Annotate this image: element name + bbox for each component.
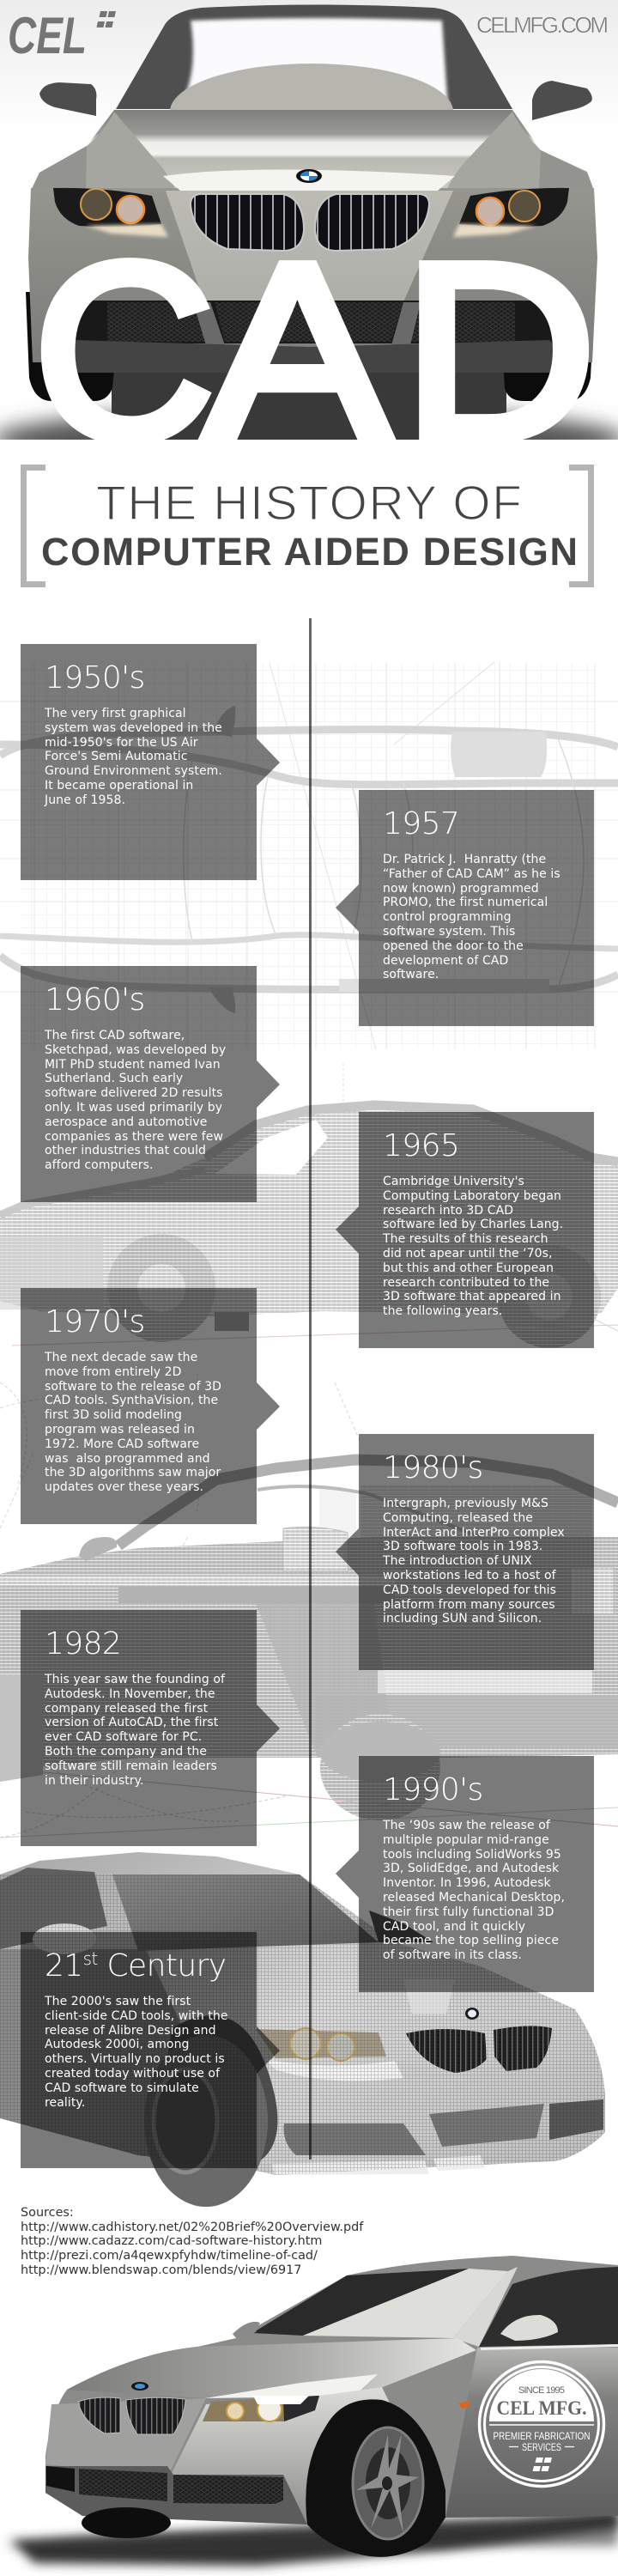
panel: 1965: but this and other European — [383, 1261, 554, 1275]
panel: 1960's: only. It was used primarily by — [45, 1101, 222, 1115]
panel: 1957: control programming — [383, 910, 512, 924]
panel: 1990's: their first fully functional 3D — [383, 1905, 554, 1919]
panel: 1957: software. — [383, 968, 439, 981]
sources: http://www.cadhistory.net/02%20Brief%20Overview.pdf — [21, 2221, 363, 2234]
title with brackets — [24, 467, 591, 584]
panel: 21st Century — [21, 1932, 280, 2168]
panel: 1980's: CAD tools developed for this — [383, 1583, 556, 1597]
panel: 1965: 3D software that appeared in — [383, 1290, 561, 1303]
panel: 1960's — [21, 966, 280, 1202]
panel: 1990's: 3D, SolidEdge, and Autodesk — [383, 1862, 559, 1875]
panel: 1957: opened the door to the — [383, 939, 524, 953]
panel: 21st Century: client-side CAD tools, with the — [45, 2009, 228, 2023]
hero: front view of car — [0, 0, 618, 471]
panel: 1980's: Computing, released the — [383, 1511, 533, 1525]
panel: 1957: development of CAD — [383, 954, 508, 968]
panel: 1960's: other industries that could — [45, 1144, 206, 1157]
panel: 1990's: tools including SolidWorks 95 — [383, 1848, 561, 1862]
panel: 1982: software still remain leaders — [45, 1759, 217, 1773]
panel: 1980's: The introduction of UNIX — [383, 1554, 532, 1568]
panel: 1970's: 1972. More CAD software — [45, 1437, 199, 1451]
panel: 1970's — [21, 1288, 280, 1524]
panel: 21st Century: 21st Century — [45, 1948, 226, 1984]
panel: 21st Century: created today without use of — [45, 2067, 220, 2081]
website label: CELMFG.COM — [476, 12, 609, 38]
panel: 21st Century: others. Virtually no product is — [45, 2052, 225, 2066]
panel: 1950's — [21, 644, 280, 880]
panel: 1950's: Ground Environment system. — [45, 764, 222, 778]
panel: 1970's: the 3D algorithms saw major — [45, 1466, 221, 1479]
panel: 1960's: software delivered 2D results — [45, 1086, 223, 1100]
panel: 1970's: move from entirely 2D — [45, 1365, 182, 1379]
panel: 1980's: 3D software tools in 1983. — [383, 1540, 542, 1553]
panel: 1957: PROMO, the first numerical — [383, 896, 548, 909]
panel: 1957: now known) programmed — [383, 882, 539, 896]
panel: 1950's: mid-1950's for the US Air — [45, 736, 198, 750]
panel: 1965: The results of this research — [383, 1232, 548, 1246]
panel: 21st Century: The 2000's saw the first — [45, 1995, 191, 2008]
panel: 1980's — [336, 1434, 594, 1670]
panel: 1990's: CAD tool, and it quickly — [383, 1920, 525, 1934]
panel: 1970's: The next decade saw the — [45, 1351, 197, 1364]
panel: 1980's: 1980's — [383, 1450, 483, 1485]
panel: 1950's: system was developed in the — [45, 721, 222, 735]
panel: 1965: Cambridge University's — [383, 1175, 524, 1188]
panel: 1957 — [336, 790, 594, 1026]
panel: 1965: software led by Charles Lang. — [383, 1218, 563, 1231]
sources: Sources: — [21, 2206, 74, 2220]
panel: 1965: did not apear until the ‘70s, — [383, 1247, 553, 1261]
panel: 1982: 1982 — [45, 1626, 121, 1662]
panel: 1980's: InterAct and InterPro complex — [383, 1526, 565, 1540]
panel: 1982: version of AutoCAD, the first — [45, 1716, 218, 1729]
panel: 1980's: platform from many sources — [383, 1598, 555, 1612]
mesh car — [0, 1852, 618, 2207]
panel: 1990's: The ‘90s saw the release of — [383, 1819, 550, 1832]
wireframe: side view car — [0, 1063, 618, 1382]
wireframe: top view car — [0, 662, 618, 1049]
panel: 1957: “Father of CAD CAM” as he is — [383, 867, 560, 881]
bottom car — [0, 2256, 618, 2566]
panel: 1960's: aerospace and automotive — [45, 1115, 207, 1129]
panel: 1950's: It became operational in — [45, 779, 193, 793]
sources: http://prezi.com/a4qewxpfyhdw/timeline-of-cad/ — [21, 2249, 318, 2263]
panel: 1960's: 1960's — [45, 982, 145, 1018]
badge: CEL MFG: PREMIER FABRICATION — [493, 2430, 591, 2442]
panel: 1970's: program was released in — [45, 1423, 195, 1437]
panel: 1950's: The very first graphical — [45, 707, 186, 720]
sources — [21, 2206, 364, 2277]
sources: http://www.blendswap.com/blends/view/6917 — [21, 2263, 301, 2277]
panel: 1990's — [336, 1756, 594, 1992]
panel: 1990's: of software in its class. — [383, 1948, 522, 1962]
panel: 1960's: Sketchpad, was developed by — [45, 1043, 226, 1057]
panel: 1982: Autodesk. In November, the — [45, 1687, 215, 1701]
panel: 1970's: CAD tools. SynthaVision, the — [45, 1394, 218, 1407]
panel: 1970's: first 3D solid modeling — [45, 1408, 182, 1422]
panel: 1980's: Intergraph, previously M&S — [383, 1497, 548, 1510]
panel: 1982 — [21, 1610, 280, 1846]
panel: 1970's: updates over these years. — [45, 1480, 203, 1494]
panel: 1965: research contributed to the — [383, 1276, 549, 1290]
panel: 1965: research into 3D CAD — [383, 1204, 513, 1218]
panel: 1982: company released the first — [45, 1702, 208, 1716]
panel: 1960's: afford computers. — [45, 1158, 153, 1172]
panel: 1982: Both the company and the — [45, 1745, 207, 1759]
panel: 1965: Computing Laboratory began — [383, 1189, 561, 1203]
panel: 1965: 1965 — [383, 1128, 459, 1163]
panel: 1950's: Force's Semi Automatic — [45, 750, 188, 763]
heading: CAD: A — [204, 212, 391, 491]
panel: 1960's: Sutherland. Such early — [45, 1072, 183, 1085]
panel: 1990's: 1990's — [383, 1772, 483, 1807]
icon: BMW badge — [296, 169, 322, 183]
panel: 1965: the following years. — [383, 1304, 502, 1318]
panel: 1957: Dr. Patrick J. Hanratty (the — [383, 853, 546, 866]
panel: 1960's: MIT PhD student named Ivan — [45, 1058, 221, 1072]
panel: 1970's: 1970's — [45, 1304, 145, 1340]
panel: 1960's: companies as there were few — [45, 1130, 223, 1144]
heading: CAD — [33, 211, 597, 492]
heading: CAD: D — [403, 211, 597, 492]
heading: CAD: C — [33, 211, 215, 491]
title with brackets: THE HISTORY OF — [96, 476, 522, 531]
panel: 1982: in their industry. — [45, 1774, 144, 1788]
panel: 1957: 1957 — [383, 806, 459, 841]
wireframe: three-quarter view car — [0, 1382, 618, 1838]
panel: 1990's: multiple popular mid-range — [383, 1833, 549, 1847]
panel: 1950's: 1950's — [45, 660, 145, 696]
panel: 1970's: software to the release of 3D — [45, 1380, 221, 1394]
timeline axis — [309, 618, 311, 2160]
badge: CEL MFG: SERVICES — [522, 2443, 561, 2453]
logo: CEL: CEL — [8, 7, 87, 64]
panel: 21st Century: CAD software to simulate — [45, 2081, 199, 2095]
panel: 1950's: June of 1958. — [45, 793, 125, 807]
panel: 1970's: was also programmed and — [45, 1452, 210, 1466]
title with brackets: COMPUTER AIDED DESIGN — [41, 530, 578, 574]
sources: http://www.cadazz.com/cad-software-history.htm — [21, 2234, 322, 2248]
panel: 1990's: Inventor. In 1996, Autodesk — [383, 1876, 551, 1890]
badge: CEL MFG — [479, 2361, 604, 2487]
panel: 1980's: workstations led to a host of — [383, 1569, 556, 1583]
badge: CEL MFG: CEL MFG. — [496, 2397, 587, 2419]
panel: 21st Century: release of Alibre Design and — [45, 2024, 216, 2038]
panel: 1990's: released Mechanical Desktop, — [383, 1891, 565, 1905]
panel: 1965 — [336, 1112, 594, 1348]
panel: 21st Century: Autodesk 2000i, among — [45, 2038, 189, 2051]
panel: 1982: ever CAD software for PC. — [45, 1730, 202, 1744]
panel: 1980's: including SUN and Silicon. — [383, 1612, 542, 1625]
panel: 1982: This year saw the founding of — [45, 1673, 225, 1686]
panel: 1957: software system. This — [383, 925, 515, 939]
panel: 1990's: became the top selling piece — [383, 1934, 559, 1947]
badge: CEL MFG: SINCE 1995 — [518, 2385, 565, 2396]
panel: 21st Century: reality. — [45, 2096, 85, 2110]
panel: 1960's: The first CAD software, — [45, 1029, 185, 1042]
